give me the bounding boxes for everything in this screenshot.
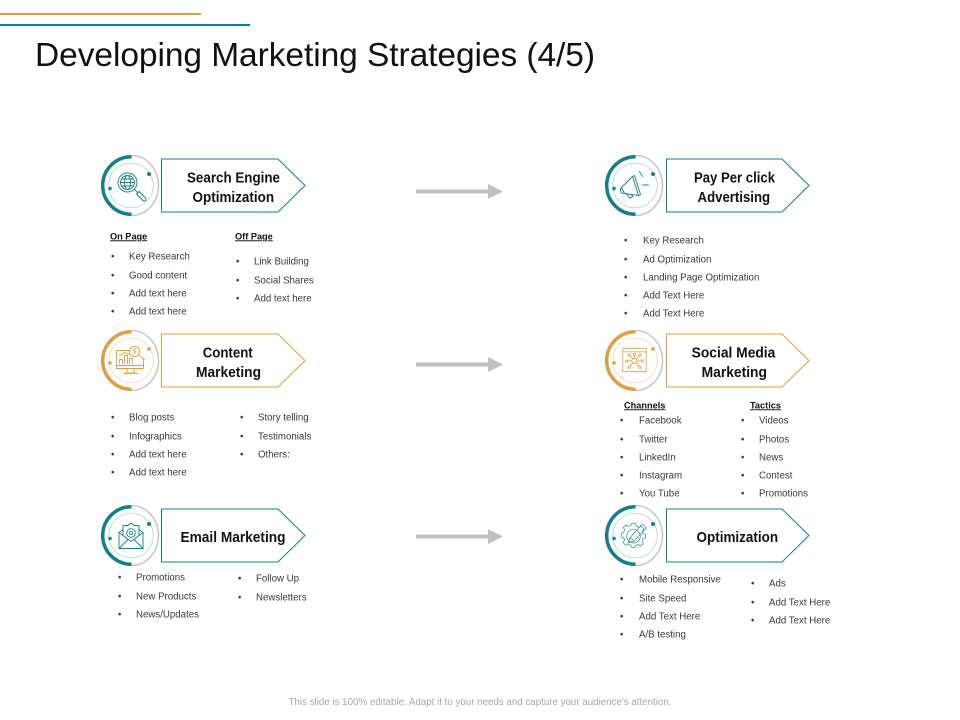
text block: on page: Add text here [129,288,187,299]
text block: optimization list left: • [620,593,624,604]
text block: on page: • [111,306,115,317]
text block: optimization list left: • [620,574,624,585]
text block: tactics [741,400,808,499]
text block: on page [110,231,190,317]
text block: on page: On Page [110,231,147,241]
text block: channels: • [620,470,624,481]
arrow: row two [416,357,503,372]
text block: content list right: • [240,449,244,460]
panel: optimization [607,506,809,566]
text block: pay per click list: • [624,272,628,283]
text block: pay per click list: Key Research [643,235,704,246]
text block: pay per click list: • [624,235,628,246]
text block: content list right: • [240,412,244,423]
panel: content marketing [103,330,305,390]
heading: Marketing [702,365,767,381]
heading: Optimization [697,530,778,546]
panel: social media marketing [607,330,809,390]
text block: optimization list right: Ads [769,578,786,589]
text block: tactics: Promotions [759,488,808,499]
text block: pay per click list: • [624,254,628,265]
arrow: row one [416,184,503,199]
text block: on page: Add text here [129,306,187,317]
text block: channels: Facebook [639,415,682,426]
text block: email list left [118,572,199,620]
text block: optimization list right: Add Text Here [769,615,830,626]
text block: tactics: Videos [759,415,789,426]
heading box [162,509,305,562]
text block: content list left: • [111,467,115,478]
text block: content list left [111,412,187,478]
text block: optimization list right: • [751,597,755,608]
text block: content list right: Testimonials [258,431,311,442]
text block: channels [620,400,682,499]
icon: globe with magnifier [103,156,158,216]
text block: pay per click list: Add Text Here [643,290,704,301]
text block: tactics: Tactics [750,400,781,410]
text block: optimization list left: A/B testing [639,629,686,640]
text block: optimization list left: • [620,629,624,640]
heading: Optimization [193,190,274,206]
text block: off page: Social Shares [254,275,314,286]
text block: channels: • [620,434,624,445]
text block: email list right: Newsletters [256,592,307,603]
text block: content list left: Blog posts [129,412,174,423]
text block: off page: Add text here [254,293,312,304]
text block: content list right: Story telling [258,412,309,423]
text block: email list right: • [238,592,242,603]
heading: Search Engine [187,170,280,186]
text block: optimization list right: Add Text Here [769,597,830,608]
icon: open envelope [103,506,158,566]
heading box [162,159,305,212]
text block: off page: • [236,293,240,304]
text block: pay per click list: Landing Page Optimization [643,272,759,283]
heading box [162,334,305,387]
text block: channels: You Tube [639,488,680,499]
text block: email list right: • [238,573,242,584]
panel: pay per click advertising [607,156,809,216]
heading box [666,334,809,387]
text block: off page: • [236,275,240,286]
text block: content list right: • [240,431,244,442]
heading: Marketing [196,365,261,381]
text block: content list left: Infographics [129,431,182,442]
heading: Advertising [698,190,770,206]
footer note: This slide is 100% editable. Adapt it to your needs and capture your audience's attention. [289,697,671,708]
heading: Email Marketing [180,530,286,546]
text block: content list left: • [111,449,115,460]
icon: gear with pencil [607,506,662,566]
text block: optimization list right: • [751,578,755,589]
arrow: row three [416,529,503,544]
text block: optimization list left: • [620,611,624,622]
text block: email list left: Promotions [136,572,185,583]
heading [694,170,776,206]
text block: tactics: • [741,415,745,426]
icon: social network window [607,330,662,390]
text block: optimization list left [620,574,721,640]
text block: tactics: • [741,452,745,463]
text block: channels: • [620,452,624,463]
text block: email list left: New Products [136,591,196,602]
icon: monitor with chart: $ [133,348,137,356]
text block: channels: Instagram [639,470,682,481]
text block: off page: • [236,256,240,267]
icon: monitor with chart [103,330,158,390]
heading: Pay Per click [694,170,776,186]
text block: channels: LinkedIn [639,452,676,463]
panel: search engine optimization [103,156,305,216]
heading: Content [203,346,253,362]
text block: email list left: • [118,572,122,583]
text block: channels: • [620,415,624,426]
text block: pay per click list: • [624,308,628,319]
heading [196,346,261,381]
text block: content list left: • [111,412,115,423]
heading [692,346,776,381]
text block: off page: Link Building [254,256,309,267]
panel: email marketing [103,506,305,566]
text block: off page: Off Page [235,231,273,241]
text block: content list right [240,412,311,460]
text block: channels: Channels [624,400,665,410]
text block: tactics: Contest [759,470,793,481]
text block: tactics: • [741,470,745,481]
text block: email list right [238,573,307,603]
icon: megaphone [607,156,662,216]
text block: on page: Key Research [129,251,190,262]
text block: tactics: • [741,434,745,445]
text block: tactics: • [741,488,745,499]
text block: email list left: News/Updates [136,609,199,620]
text block: pay per click list: Ad Optimization [643,254,711,265]
title: Developing Marketing Strategies (4/5) [35,37,595,74]
heading box [666,159,809,212]
text block: optimization list left: Mobile Responsive [639,574,721,585]
heading box [666,509,809,562]
text block: content list left: Add text here [129,449,187,460]
text block: on page: • [111,270,115,281]
text block: off page [235,231,314,304]
text block: on page: • [111,251,115,262]
text block: channels: • [620,488,624,499]
text block: content list right: Others: [258,449,290,460]
text block: email list right: Follow Up [256,573,299,584]
text block: pay per click list: Add Text Here [643,308,704,319]
text block: on page: • [111,288,115,299]
text block: tactics: Photos [759,434,789,445]
text block: channels: Twitter [639,434,668,445]
text block: optimization list left: Add Text Here [639,611,700,622]
text block: email list left: • [118,609,122,620]
text block: optimization list right [751,578,830,626]
text block: content list left: Add text here [129,467,187,478]
text block: email list left: • [118,591,122,602]
text block: optimization list left: Site Speed [639,593,686,604]
text block: content list left: • [111,431,115,442]
text block: optimization list right: • [751,615,755,626]
heading [187,170,280,206]
text block: on page: Good content [129,270,187,281]
top accent lines [0,13,250,26]
text block: tactics: News [759,452,783,463]
heading: Social Media [692,346,776,362]
text block: pay per click list: • [624,290,628,301]
text block: pay per click list [624,235,759,319]
